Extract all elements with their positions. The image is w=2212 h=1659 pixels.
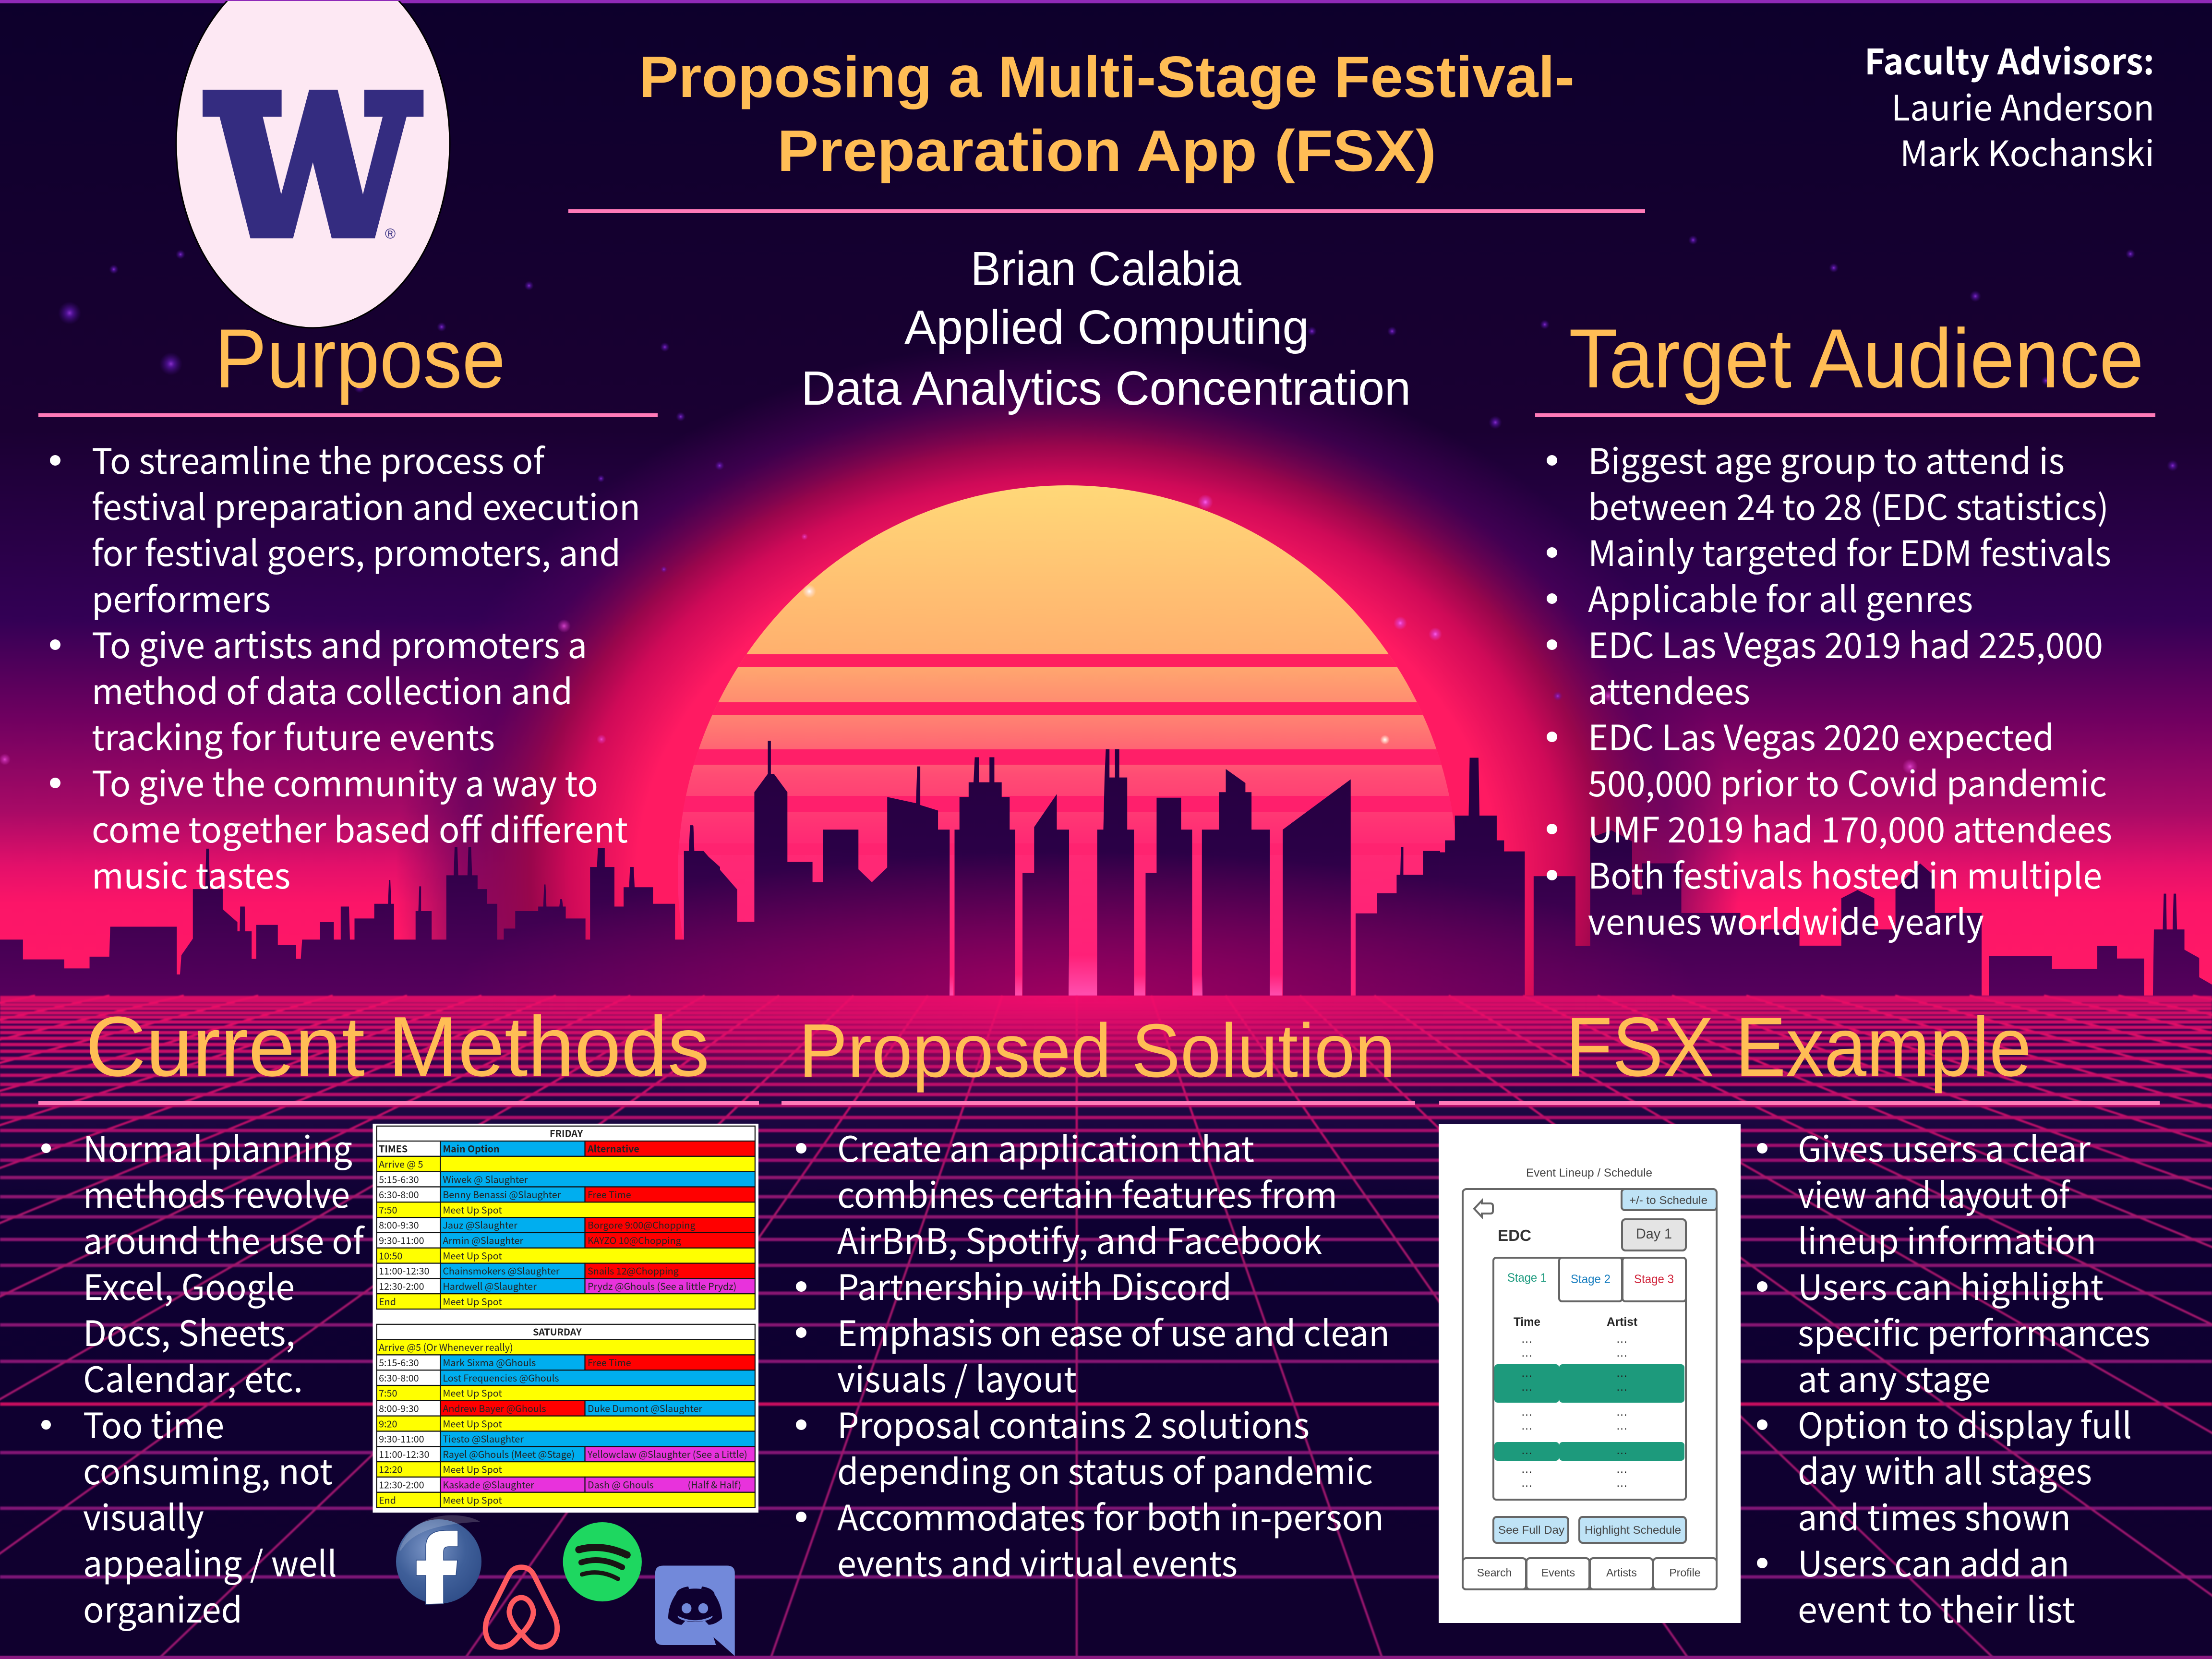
purpose bullets: To streamline the process of bbox=[92, 433, 545, 484]
bottom navigation: Search bbox=[1477, 1566, 1512, 1579]
current methods bullets: consuming, not bbox=[83, 1444, 333, 1495]
fsx example bullets bbox=[1757, 1121, 2150, 1633]
target audience bullets: between 24 to 28 (EDC statistics) bbox=[1588, 480, 2109, 530]
table: saturday: SATURDAY bbox=[533, 1324, 582, 1338]
action buttons bbox=[1493, 1517, 1686, 1543]
stage schedule box: ... bbox=[1521, 1333, 1533, 1346]
proposed solution bullets: Create an application that bbox=[837, 1121, 1254, 1172]
current methods bullets: Too time bbox=[83, 1398, 224, 1449]
table: friday: 12:30-2:00 bbox=[379, 1279, 424, 1293]
table: friday: 8:00-9:30 bbox=[379, 1218, 419, 1232]
stage schedule box: ... bbox=[1616, 1346, 1628, 1359]
panel: fsx example bbox=[1439, 1000, 2160, 1633]
proposed solution bullets: AirBnB, Spotify, and Facebook bbox=[837, 1214, 1322, 1264]
purpose bullets: To give artists and promoters a bbox=[92, 618, 587, 669]
table: saturday: Rayel @Ghouls (Meet @Stage) bbox=[443, 1447, 575, 1461]
purpose bullets: performers bbox=[92, 572, 271, 623]
schedule button bbox=[1622, 1189, 1717, 1210]
table: friday: Free Time bbox=[588, 1187, 631, 1201]
current methods bullets: appealing / well bbox=[83, 1536, 337, 1587]
stage schedule box: ... bbox=[1521, 1346, 1533, 1359]
proposed solution bullets: Emphasis on ease of use and clean bbox=[837, 1306, 1390, 1357]
heading: fsx example: FSX Example bbox=[1566, 1000, 2032, 1094]
table: saturday: End bbox=[379, 1492, 396, 1506]
purpose bullets: To give the community a way to bbox=[92, 756, 598, 807]
stage schedule box: ... bbox=[1616, 1419, 1628, 1432]
sun glow bbox=[0, 288, 2212, 998]
action buttons: See Full Day bbox=[1498, 1524, 1565, 1536]
logo: university W: ® bbox=[385, 226, 396, 242]
icon: airbnb bbox=[485, 1567, 557, 1647]
faculty advisors: Mark Kochanski bbox=[1900, 126, 2154, 177]
background sky bbox=[0, 0, 2212, 998]
target audience bullets: EDC Las Vegas 2019 had 225,000 bbox=[1588, 618, 2103, 669]
table: friday: 10:50 bbox=[379, 1248, 402, 1262]
current methods bullets: Docs, Sheets, bbox=[83, 1306, 295, 1357]
panel: proposed solution bbox=[781, 1009, 1415, 1587]
table: saturday: Lost Frequencies @Ghouls bbox=[443, 1370, 559, 1384]
bottom navigation: Artists bbox=[1606, 1566, 1637, 1579]
table: saturday: (Half & Half) bbox=[687, 1478, 741, 1491]
table: saturday: Arrive @5 (Or Whenever really) bbox=[379, 1340, 513, 1354]
purpose bullets: for festival goers, promoters, and bbox=[92, 526, 621, 577]
event name: EDC bbox=[1498, 1226, 1531, 1244]
city skyline bbox=[0, 741, 2212, 996]
table: saturday: 9:30-11:00 bbox=[379, 1431, 424, 1445]
current methods bullets: methods revolve bbox=[83, 1167, 350, 1218]
table: friday: Borgore 9:00@Chopping bbox=[588, 1218, 696, 1232]
table: friday: Armin @Slaughter bbox=[443, 1233, 523, 1247]
faculty advisors: Faculty Advisors: bbox=[1864, 34, 2154, 85]
fsx example bullets: Option to display full bbox=[1798, 1398, 2132, 1449]
stage schedule box: ... bbox=[1616, 1444, 1628, 1457]
author block: Brian Calabia bbox=[971, 242, 1241, 296]
purpose bullets: method of data collection and bbox=[92, 664, 573, 715]
faculty advisors: Laurie Anderson bbox=[1891, 80, 2154, 131]
target audience bullets: attendees bbox=[1588, 664, 1750, 715]
panel: target audience bbox=[1535, 312, 2155, 945]
table: friday: 11:00-12:30 bbox=[379, 1263, 430, 1277]
panel: purpose bbox=[38, 312, 658, 899]
table: friday: Jauz @Slaughter bbox=[443, 1218, 517, 1232]
purpose bullets: come together based off different bbox=[92, 802, 628, 853]
grid floor bbox=[0, 994, 2212, 1659]
table: friday: Benny Benassi @Slaughter bbox=[443, 1187, 561, 1201]
icon: discord bbox=[655, 1566, 735, 1656]
target audience bullets: Biggest age group to attend is bbox=[1588, 433, 2065, 484]
action buttons: Highlight Schedule bbox=[1585, 1524, 1681, 1536]
title: Preparation App (FSX) bbox=[777, 118, 1436, 183]
table: saturday: Meet Up Spot bbox=[443, 1386, 502, 1400]
target audience bullets: Mainly targeted for EDM festivals bbox=[1588, 526, 2111, 577]
table: saturday: 8:00-9:30 bbox=[379, 1401, 419, 1415]
stage schedule box: ... bbox=[1616, 1333, 1628, 1346]
table: friday: Snails 12@Chopping bbox=[588, 1263, 679, 1277]
proposed solution bullets bbox=[796, 1121, 1390, 1587]
table: saturday: Duke Dumont @Slaughter bbox=[588, 1401, 702, 1415]
current methods bullets: organized bbox=[83, 1582, 242, 1633]
stage schedule box: Artist bbox=[1607, 1315, 1638, 1329]
current methods bullets bbox=[41, 1121, 365, 1633]
table: friday: 5:15-6:30 bbox=[379, 1172, 419, 1186]
table: friday: KAYZO 10@Chopping bbox=[588, 1233, 681, 1247]
skyline light slits bbox=[950, 955, 1282, 997]
stage schedule box: ... bbox=[1521, 1419, 1533, 1432]
fsx example bullets: at any stage bbox=[1798, 1352, 1991, 1403]
proposed solution bullets: combines certain features from bbox=[837, 1167, 1337, 1218]
table: saturday: 6:30-8:00 bbox=[379, 1370, 419, 1384]
current methods bullets: Calendar, etc. bbox=[83, 1352, 303, 1403]
fsx example bullets: Gives users a clear bbox=[1798, 1121, 2091, 1172]
stage schedule box: ... bbox=[1616, 1381, 1628, 1394]
table: saturday: Meet Up Spot bbox=[443, 1492, 502, 1506]
table: friday: 6:30-8:00 bbox=[379, 1187, 419, 1201]
table: saturday: 9:20 bbox=[379, 1416, 397, 1430]
table: saturday bbox=[377, 1324, 755, 1508]
stage schedule box: ... bbox=[1521, 1463, 1533, 1476]
table: saturday: 5:15-6:30 bbox=[379, 1355, 419, 1369]
bottom navigation: Events bbox=[1541, 1566, 1575, 1579]
stage schedule box: ... bbox=[1521, 1406, 1533, 1419]
table: friday: Alternative bbox=[587, 1142, 639, 1155]
target audience bullets bbox=[1547, 433, 2112, 945]
heading: target audience: Target Audience bbox=[1569, 312, 2144, 406]
table: friday: Hardwell @Slaughter bbox=[443, 1279, 537, 1293]
stage schedule box: Stage 1 bbox=[1507, 1271, 1547, 1285]
current methods bullets: visually bbox=[83, 1490, 204, 1541]
target audience bullets: EDC Las Vegas 2020 expected bbox=[1588, 710, 2054, 761]
table: friday: Chainsmokers @Slaughter bbox=[443, 1263, 560, 1277]
table: friday bbox=[377, 1126, 755, 1309]
stage schedule box bbox=[1493, 1258, 1686, 1500]
table: friday: 7:50 bbox=[379, 1202, 397, 1216]
fsx example bullets: event to their list bbox=[1798, 1582, 2075, 1633]
stage schedule box: Stage 3 bbox=[1634, 1273, 1674, 1286]
logo: university W bbox=[176, 0, 450, 328]
table: saturday: Meet Up Spot bbox=[443, 1416, 502, 1430]
table: friday: Main Option bbox=[443, 1142, 500, 1155]
sun sparkles bbox=[803, 494, 1442, 745]
stage schedule box: Stage 2 bbox=[1571, 1273, 1611, 1286]
table: saturday: Yellowclaw @Slaughter (See a Little) bbox=[587, 1447, 747, 1461]
day selector bbox=[1622, 1219, 1686, 1250]
purpose bullets: music tastes bbox=[92, 848, 290, 899]
fsx example bullets: day with all stages bbox=[1798, 1444, 2092, 1495]
table: friday: TIMES bbox=[379, 1142, 408, 1155]
fsx example bullets: lineup information bbox=[1798, 1214, 2096, 1264]
icon: facebook bbox=[396, 1515, 481, 1604]
proposed solution bullets: events and virtual events bbox=[837, 1536, 1238, 1587]
icon: spotify bbox=[563, 1522, 642, 1601]
title: Proposing a Multi-Stage Festival- bbox=[639, 44, 1575, 109]
purpose bullets bbox=[50, 433, 640, 899]
heading: proposed solution: Proposed Solution bbox=[799, 1009, 1395, 1093]
author block bbox=[801, 242, 1411, 415]
target audience bullets: Both festivals hosted in multiple bbox=[1588, 848, 2102, 899]
target audience bullets: 500,000 prior to Covid pandemic bbox=[1588, 756, 2107, 807]
table: friday: 9:30-11:00 bbox=[379, 1233, 424, 1247]
table: saturday: Mark Sixma @Ghouls bbox=[443, 1355, 536, 1369]
table: friday: End bbox=[379, 1294, 396, 1308]
stage schedule box: ... bbox=[1616, 1477, 1628, 1490]
table: saturday: 11:00-12:30 bbox=[379, 1447, 430, 1461]
app mockup wireframe bbox=[1439, 1124, 1741, 1623]
stage schedule box: ... bbox=[1521, 1477, 1533, 1490]
table: friday: Prydz @Ghouls (See a little Prydz) bbox=[588, 1279, 736, 1293]
target audience bullets: venues worldwide yearly bbox=[1588, 894, 1984, 945]
table: saturday: Meet Up Spot bbox=[443, 1462, 502, 1476]
table: friday: Arrive @ 5 bbox=[379, 1156, 423, 1170]
purpose bullets: festival preparation and execution bbox=[92, 480, 640, 530]
table: saturday: 7:50 bbox=[379, 1386, 397, 1400]
schedule button: +/- to Schedule bbox=[1629, 1194, 1707, 1206]
heading: purpose bbox=[38, 312, 658, 417]
faculty advisors bbox=[1864, 34, 2154, 177]
back arrow icon bbox=[1474, 1201, 1493, 1217]
stage schedule box: ... bbox=[1521, 1381, 1533, 1394]
bottom navigation bbox=[1463, 1558, 1717, 1589]
bottom navigation: Profile bbox=[1669, 1566, 1701, 1579]
fsx example bullets: specific performances bbox=[1798, 1306, 2150, 1357]
stage schedule box: Time bbox=[1514, 1315, 1540, 1329]
table: friday: FRIDAY bbox=[550, 1126, 583, 1140]
proposed solution bullets: depending on status of pandemic bbox=[837, 1444, 1373, 1495]
stage schedule box: ... bbox=[1521, 1367, 1533, 1380]
current methods bullets: Excel, Google bbox=[83, 1260, 295, 1310]
current methods bullets: Normal planning bbox=[83, 1121, 352, 1172]
stage schedule box: ... bbox=[1616, 1367, 1628, 1380]
proposed solution bullets: Proposal contains 2 solutions bbox=[837, 1398, 1310, 1449]
table: friday: Meet Up Spot bbox=[443, 1202, 502, 1216]
table: saturday: Andrew Bayer @Ghouls bbox=[443, 1401, 546, 1415]
sun with stripes bbox=[672, 485, 1464, 997]
heading: current methods: Current Methods bbox=[85, 999, 709, 1094]
heading: purpose: Purpose bbox=[215, 312, 505, 406]
fsx example bullets: view and layout of bbox=[1798, 1167, 2070, 1218]
heading: fsx example bbox=[1439, 1000, 2160, 1105]
table: saturday: Tiesto @Slaughter bbox=[443, 1431, 524, 1445]
author block: Applied Computing bbox=[904, 301, 1309, 354]
stage schedule box: ... bbox=[1616, 1406, 1628, 1419]
top border strip bbox=[0, 0, 2212, 3]
target audience bullets: Applicable for all genres bbox=[1588, 572, 1973, 623]
stage schedule box: ... bbox=[1616, 1463, 1628, 1476]
day selector: Day 1 bbox=[1636, 1226, 1672, 1242]
panel: current methods bbox=[38, 999, 759, 1656]
current methods bullets: around the use of bbox=[83, 1214, 365, 1264]
table: saturday: 12:30-2:00 bbox=[379, 1478, 424, 1491]
proposed solution bullets: visuals / layout bbox=[837, 1352, 1077, 1403]
table: friday: Wiwek @ Slaughter bbox=[443, 1172, 528, 1186]
target audience bullets: UMF 2019 had 170,000 attendees bbox=[1588, 802, 2112, 853]
table: saturday: 12:20 bbox=[379, 1462, 402, 1476]
fsx example bullets: and times shown bbox=[1798, 1490, 2071, 1541]
table: saturday: Free Time bbox=[588, 1355, 631, 1369]
proposed solution bullets: Accommodates for both in-person bbox=[837, 1490, 1384, 1541]
app mockup wireframe: Event Lineup / Schedule bbox=[1526, 1166, 1652, 1179]
schedule spreadsheet image bbox=[373, 1124, 758, 1513]
table: friday: Meet Up Spot bbox=[443, 1248, 502, 1262]
author block: Data Analytics Concentration bbox=[801, 361, 1411, 415]
fsx example bullets: Users can highlight bbox=[1798, 1260, 2104, 1310]
purpose bullets: tracking for future events bbox=[92, 710, 495, 761]
table: saturday: Dash @ Ghouls bbox=[588, 1478, 654, 1491]
table: friday: Meet Up Spot bbox=[443, 1294, 502, 1308]
proposed solution bullets: Partnership with Discord bbox=[837, 1260, 1232, 1310]
title bbox=[568, 44, 1645, 213]
stars bbox=[0, 235, 2178, 774]
stage schedule box: ... bbox=[1521, 1444, 1533, 1457]
table: saturday: Kaskade @Slaughter bbox=[443, 1478, 534, 1491]
fsx example bullets: Users can add an bbox=[1798, 1536, 2069, 1587]
